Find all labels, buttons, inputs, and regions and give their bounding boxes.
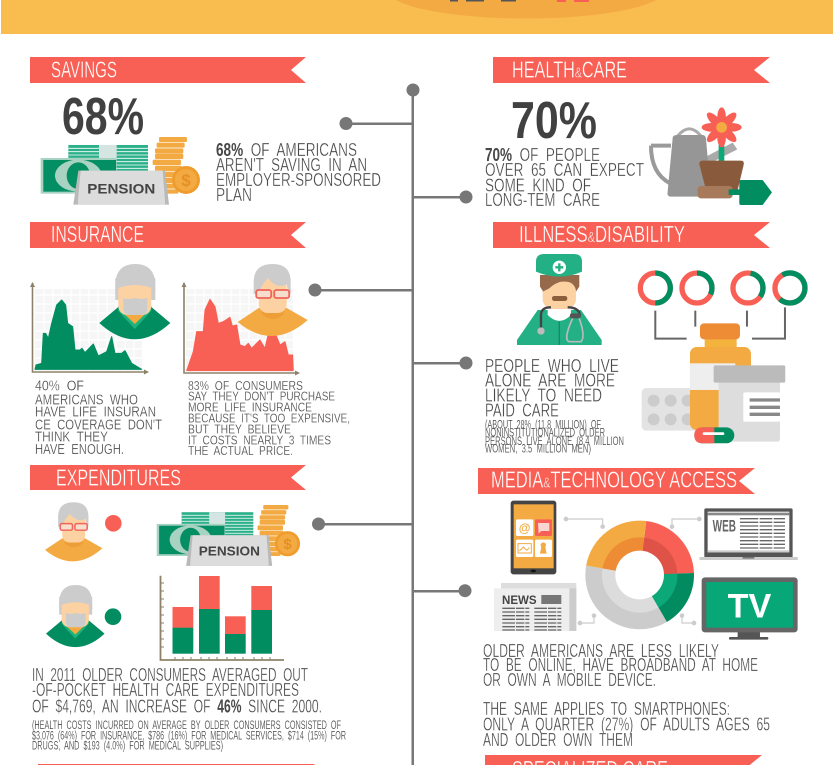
illness text: PEOPLE WHO LIVE [485,356,619,376]
icon: watering can, flower and trowel [651,107,772,205]
health text: OVER 65 CAN EXPECT [485,160,644,180]
bar chart [160,576,284,660]
panel: savings [30,56,381,205]
icon: newspaper [494,583,576,631]
savings ribbon [30,56,306,83]
icon: pension money small [157,505,300,566]
insurance text left: THINK THEY [35,429,108,446]
insurance text right [188,378,350,458]
insurance text right: 83% OF CONSUMERS [188,378,303,393]
illness footnote [485,419,624,456]
icon: newspaper: NEWS [502,593,537,607]
savings ribbon: SAVINGS [51,56,117,82]
icon: pension money: $ [181,171,191,190]
illness footnote: (ABOUT 28% (11.8 MILLION) OF [485,419,601,431]
next ribbon left, cut off [38,764,315,765]
illness text: ALONE ARE MORE [485,371,615,391]
illness text: PAID CARE [485,401,559,421]
icon: pension money small: PENSION [199,545,260,559]
icon: laptop web: WEB [713,517,736,536]
panel: expenditures [30,465,346,753]
insurance text right: BUT THEY BELIEVE [188,421,291,436]
insurance text left [35,378,162,458]
icon: pension money [41,137,200,205]
media text: OR OWN A MOBILE DEVICE. [483,670,656,690]
expenditures footnote: $3,076 (64%) FOR INSURANCE, $786 (16%) FOR MEDICAL SERVICES, $714 (15%) FOR [32,731,346,743]
ring charts [640,268,810,339]
insurance text left: HAVE ENOUGH. [35,441,124,458]
illness ribbon: ILLNESS&DISABILITY [519,221,685,247]
health ribbon [493,56,770,83]
icon: laptop web [699,508,798,560]
illness ribbon [493,221,770,248]
media text: AND OLDER OWN THEM [483,730,633,750]
icon: tablet: @ [519,521,530,535]
illness text: LIKELY TO NEED [485,386,602,406]
insurance text right: MORE LIFE INSURANCE [188,399,312,414]
expenditures footnote [32,720,346,753]
expenditures text [32,665,322,717]
expenditures footnote: DRUGS, AND $193 (4.0%) FOR MEDICAL SUPPLIES) [32,741,223,753]
panel: media and technology access [478,467,798,750]
savings text: AREN'T SAVING IN AN [216,155,367,175]
panel: insurance [30,221,350,458]
health text: 70% OF PEOPLE [485,145,600,165]
health text: SOME KIND OF [485,176,591,196]
legend dot green [105,608,121,625]
insurance ribbon [30,221,306,248]
donut chart with connectors [564,517,702,629]
illness footnote: NONINSTITUTIONALIZED OLDER [485,428,605,440]
savings text: PLAN [216,185,252,205]
insurance text right: THE ACTUAL PRICE. [188,443,293,458]
savings text: 68% OF AMERICANS [216,140,357,160]
health ribbon: HEALTH&CARE [512,56,627,82]
expenditures footnote: (HEALTH COSTS INCURRED ON AVERAGE BY OLDER CONSUMERS CONSISTED OF [32,720,341,732]
health text [485,145,644,210]
media text [483,641,770,750]
icon: nurse [517,254,602,345]
chart: red area [182,282,300,376]
icon: medicine bottles and pills [642,323,785,443]
expenditures ribbon [30,465,306,491]
header band [1,0,833,34]
big number 68%: 68% [62,88,144,146]
expenditures text: OF $4,769, AN INCREASE OF 46% SINCE 2000. [32,697,322,717]
icon: older woman small [45,502,102,561]
savings text: EMPLOYER-SPONSORED [216,170,381,190]
icon: tablet [511,501,556,574]
chart: green area [30,282,149,374]
icon: older man [99,264,170,339]
insurance text left: AMERICANS WHO [35,391,138,408]
big number 70%: 70% [511,92,597,150]
panel: health and care [485,56,772,210]
icon: tv: TV [728,588,771,626]
insurance text left: CE COVERAGE DON'T [35,416,162,433]
expenditures text: IN 2011 OLDER CONSUMERS AVERAGED OUT [32,665,308,685]
insurance ribbon: INSURANCE [51,221,144,247]
insurance text left: 40% OF [35,378,84,395]
insurance text right: BECAUSE IT'S TOO EXPENSIVE, [188,410,350,425]
timeline spine and connectors [308,84,472,765]
illness text [485,356,619,421]
icon: pension money small: $ [283,536,292,553]
expenditures text: -OF-POCKET HEALTH CARE EXPENDITURES [32,680,299,700]
icon: tv [702,577,798,640]
icon: pension money: PENSION [87,180,155,196]
expenditures ribbon: EXPENDITURES [56,465,181,491]
insurance text right: SAY THEY DON'T PURCHASE [188,389,335,404]
icon: older man small [46,585,105,647]
legend dot red [105,515,122,532]
media text: OLDER AMERICANS ARE LESS LIKELY [483,641,719,661]
media ribbon: MEDIA&TECHNOLOGY ACCESS [491,467,737,493]
insurance text left: HAVE LIFE INSURAN [35,404,156,421]
illness footnote: WOMEN, 3.5 MILLION MEN) [485,444,591,456]
panel: illness and disability [485,221,810,456]
insurance text right: IT COSTS NEARLY 3 TIMES [188,432,331,447]
savings text [216,140,381,205]
illness footnote: PERSONS LIVE ALONE (8.4 MILLION [485,436,624,448]
icon: older woman [238,264,308,336]
health text: LONG-TEM CARE [485,190,600,210]
